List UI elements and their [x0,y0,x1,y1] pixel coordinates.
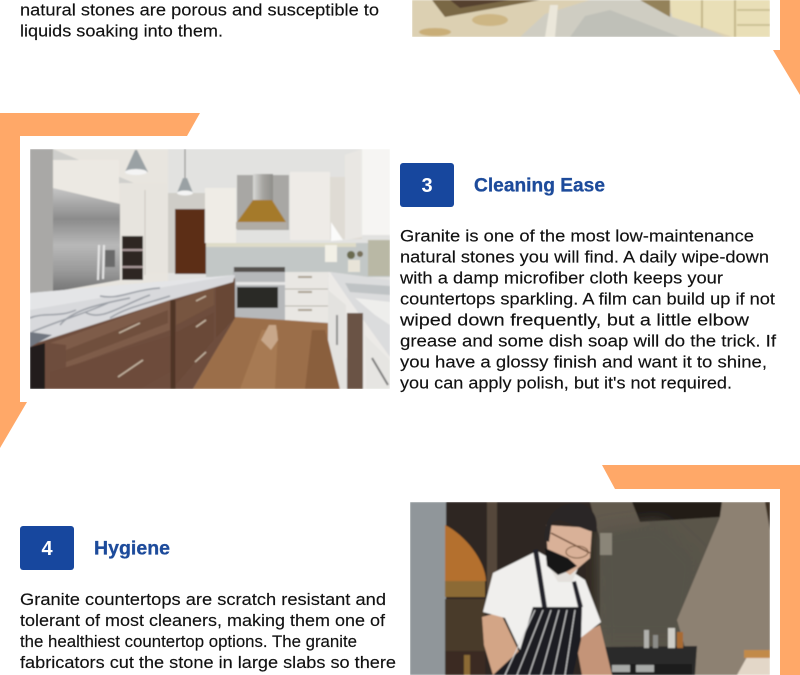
decorative corner: top right orange [773,0,800,95]
text block: cleaning ease paragraph: with a damp microfiber cloth keeps your [399,268,723,288]
text block: cleaning ease paragraph: wiped down frequently, but a little elbow [399,310,750,330]
image: masked chef in apron [410,502,770,675]
heading: Cleaning Ease: Cleaning Ease [474,174,605,196]
text block: hygiene paragraph: the healthiest countertop options. The granite [20,632,357,651]
text block: hygiene paragraph: fabricators cut the stone in large slabs so there [20,653,396,672]
text block: top left paragraph end: liquids soaking into them. [20,22,223,40]
badge: number 4: 4 [41,538,53,560]
text block: hygiene paragraph: Granite countertops are scratch resistant and [20,590,386,609]
heading: Hygiene: Hygiene [94,538,170,560]
image: granite countertop with cream cabinets [412,0,770,37]
text block: cleaning ease paragraph: Granite is one of the most low-maintenance [400,226,754,246]
decorative corner: section 3 orange frame [0,113,200,448]
text block: top left paragraph end: natural stones are porous and susceptible to [20,0,379,20]
badge: number 3: 3 [421,175,433,197]
badge: number 3 [400,163,454,207]
text block: hygiene paragraph: tolerant of most cleaners, making them one of [20,611,385,630]
text block: cleaning ease paragraph: countertops sparkling. A film can build up if not [400,290,775,308]
text block: hygiene paragraph [20,590,396,672]
decorative corner: section 4 orange frame [602,465,800,675]
badge: number 4 [20,526,74,570]
text block: cleaning ease paragraph: you can apply polish, but it's not required. [400,374,732,392]
image: kitchen with marble island [30,149,390,389]
text block: cleaning ease paragraph [399,226,776,392]
text block: cleaning ease paragraph: natural stones you will find. A daily wipe-down [400,248,769,266]
text block: top left paragraph end [20,0,379,40]
text block: cleaning ease paragraph: you have a glossy finish and want it to shine, [400,352,767,372]
text block: cleaning ease paragraph: grease and some dish soap will do the trick. If [400,332,776,350]
